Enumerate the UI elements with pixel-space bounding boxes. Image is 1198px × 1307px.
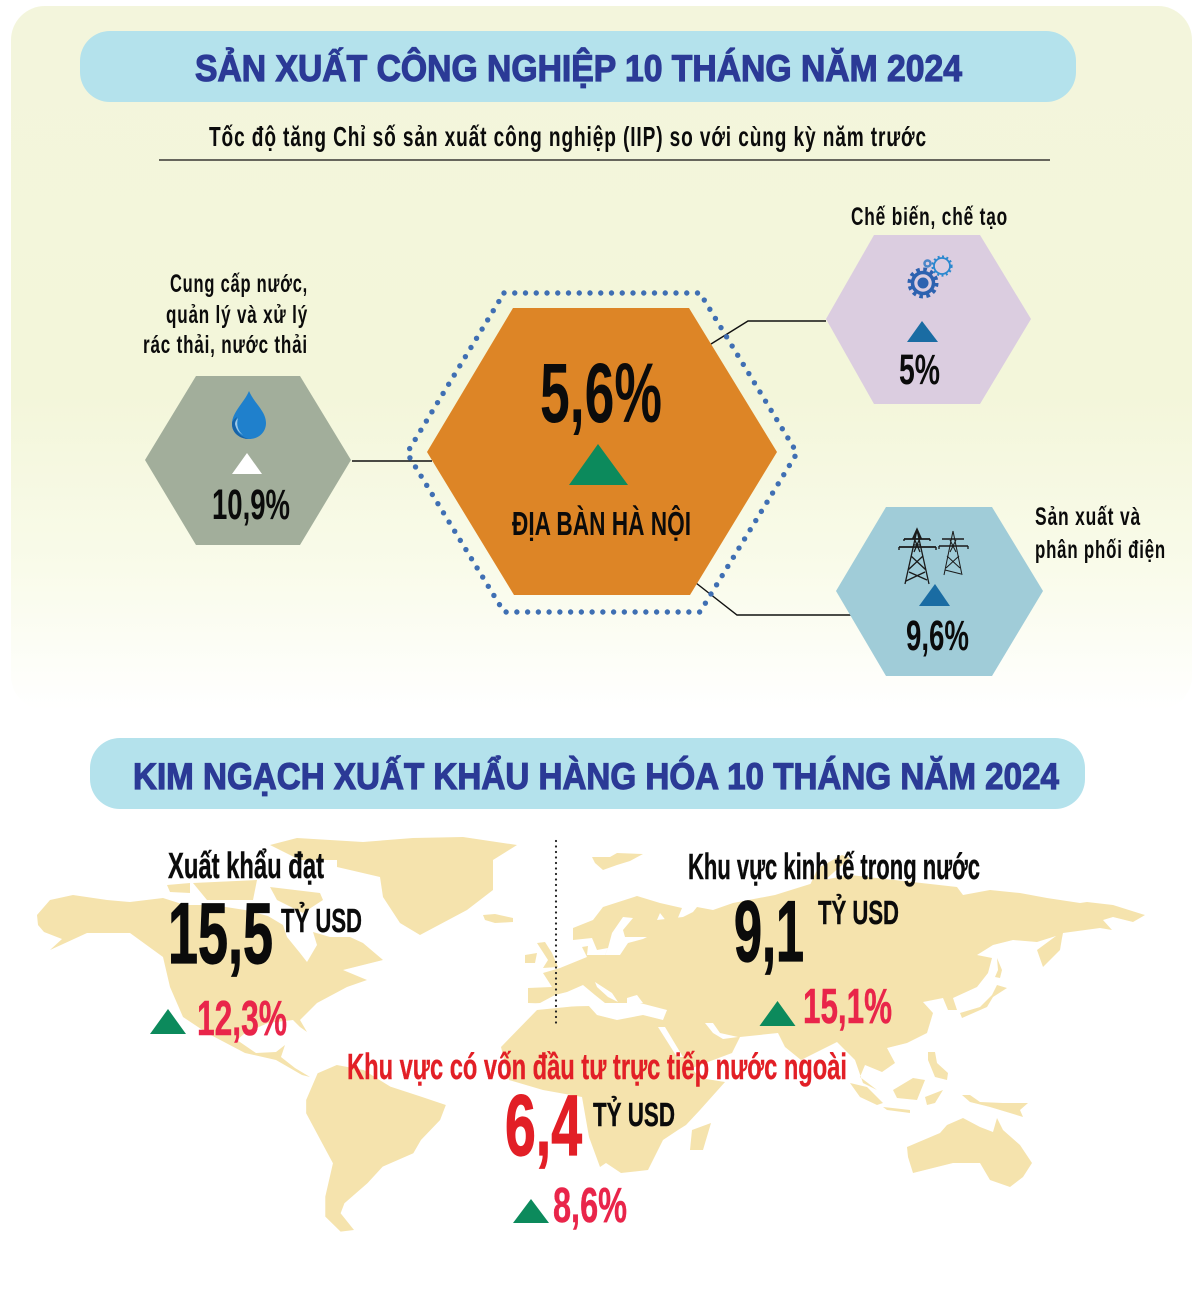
- hexagon label: quản lý và xử lý: [166, 301, 308, 329]
- icon: power pylons: [899, 530, 968, 584]
- growth: 15,1%: [803, 980, 892, 1034]
- map: Southeast Asian islands: [850, 1052, 948, 1113]
- heading: exports: [90, 738, 1085, 809]
- value: 5%: [899, 346, 940, 394]
- panel: water supply: [143, 270, 351, 545]
- value: 5,6%: 5,6%: [540, 346, 662, 440]
- label: Chế biến, chế tạo: [851, 203, 1008, 231]
- label: Xuất khẩu đạt: [168, 845, 324, 886]
- value: 9,1: [734, 884, 804, 980]
- map: seas: [520, 917, 738, 1057]
- map: Madagascar: [690, 1123, 711, 1150]
- block: FDI sector: [347, 1046, 847, 1233]
- label: Sản xuất và: [1035, 503, 1141, 531]
- map: Iceland: [483, 914, 513, 923]
- map: South America: [306, 1065, 446, 1232]
- value: 6,4: [505, 1078, 582, 1174]
- map: Japan and Sakhalin: [960, 958, 1007, 1018]
- hexagon: [145, 376, 351, 545]
- hexagon label: [143, 270, 308, 359]
- label: Khu vực kinh tế trong nước: [688, 846, 980, 887]
- map: Eurasia and Africa: [501, 875, 1145, 1173]
- panel: manufacturing: [826, 203, 1031, 404]
- panel: central hexagon Hanoi: [407, 293, 797, 612]
- map: New Guinea: [962, 1095, 1028, 1117]
- panel: industrial production background: [11, 6, 1192, 710]
- triangle up: [232, 453, 262, 474]
- hexagon label: Cung cấp nước,: [170, 270, 308, 298]
- label: Hanoi: ĐỊA BÀN HÀ NỘI: [512, 504, 691, 542]
- value: 10,9%: [212, 481, 290, 529]
- hexagon: [826, 235, 1031, 404]
- heading: industrial production: SẢN XUẤT CÔNG NGHIỆP 10 THÁNG NĂM 2024: [195, 47, 962, 89]
- heading: industrial production: [80, 31, 1076, 102]
- value: 15,5: [168, 886, 273, 982]
- map: Greenland: [270, 837, 517, 935]
- hexagon: [836, 507, 1043, 676]
- triangle up: [907, 321, 938, 342]
- value: 9,6%: [906, 612, 969, 660]
- triangle up: [919, 584, 950, 606]
- triangle up: [513, 1199, 549, 1223]
- label: Khu vực có vốn đầu tư trực tiếp nước ngoài: [347, 1046, 847, 1087]
- panel: electricity: [836, 503, 1166, 676]
- block: total exports: [150, 845, 362, 1046]
- icon: gears: [910, 256, 952, 296]
- world map: [37, 837, 1145, 1232]
- triangle up: [150, 1009, 186, 1034]
- heading: exports: KIM NGẠCH XUẤT KHẨU HÀNG HÓA 10 THÁNG NĂM 2024: [133, 755, 1059, 797]
- map: British Isles: [525, 942, 558, 968]
- unit: TỶ USD: [818, 894, 899, 931]
- map: Australia: [907, 1118, 1032, 1187]
- growth: 12,3%: [197, 992, 287, 1046]
- unit: TỶ USD: [593, 1096, 675, 1133]
- map: Svalbard and Novaya Zemlya: [592, 853, 850, 885]
- map: North America: [37, 895, 383, 1077]
- triangle up: [760, 1001, 796, 1026]
- connector lines: [352, 321, 852, 615]
- block: domestic sector: [688, 846, 980, 1034]
- dotted divider: [555, 841, 557, 1026]
- growth: 8,6%: [553, 1179, 627, 1233]
- icon: water drop: [232, 391, 266, 439]
- label: [1035, 503, 1166, 564]
- map: Canadian Arctic islands: [167, 880, 323, 913]
- triangle up: [569, 444, 628, 485]
- unit: TỶ USD: [281, 902, 362, 939]
- hexagon label: rác thải, nước thải: [143, 331, 308, 359]
